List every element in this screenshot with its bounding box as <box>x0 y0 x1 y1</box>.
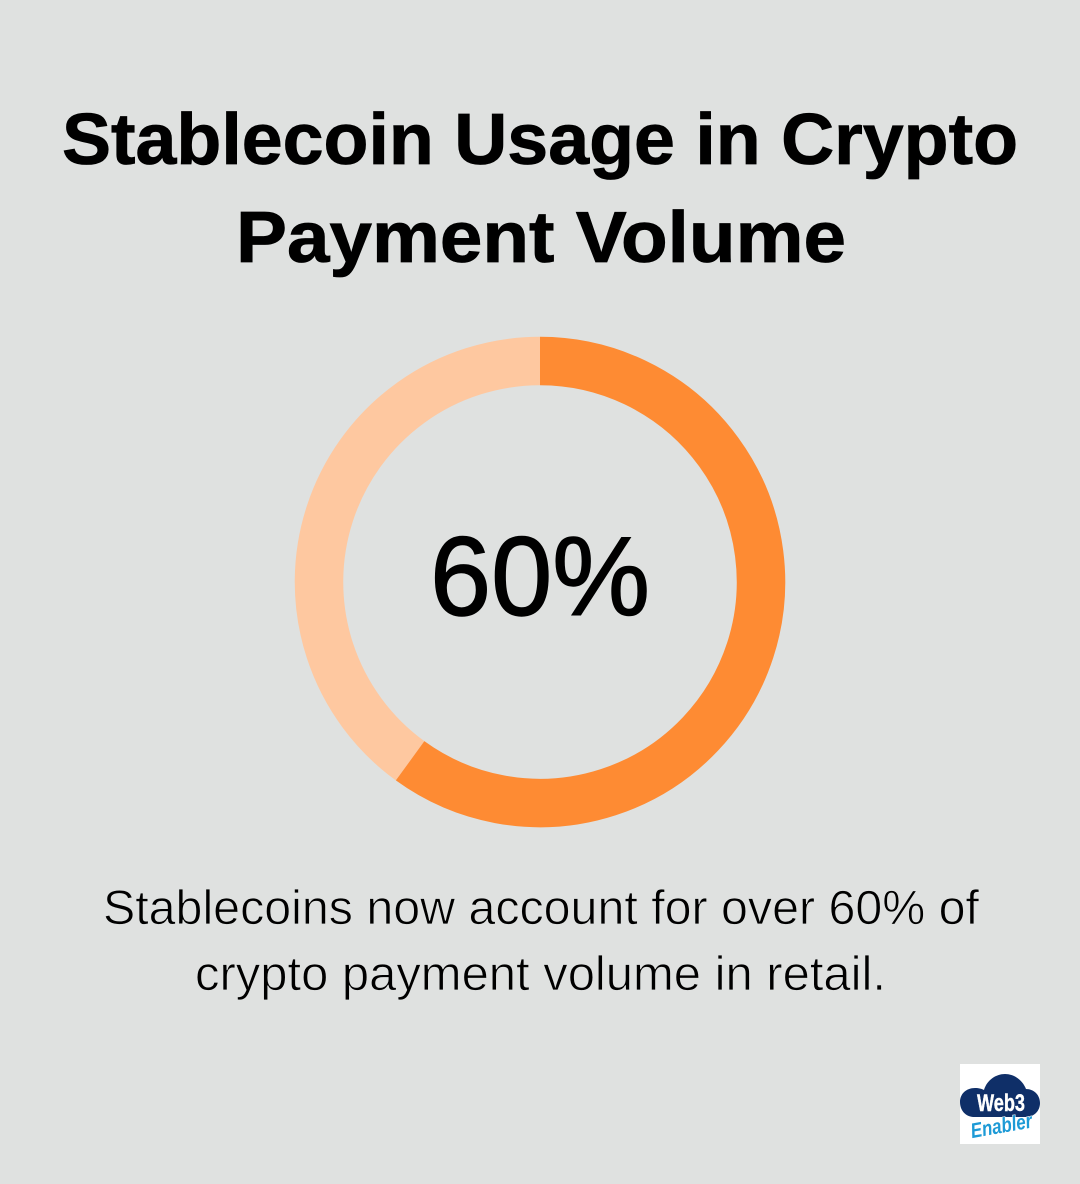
description text: crypto payment volume in retail. <box>195 948 886 1001</box>
donut remainder segment <box>319 361 540 761</box>
title <box>62 100 1018 278</box>
logo script: Enabler <box>969 1109 1035 1143</box>
logo: Web3 Enabler <box>960 1064 1040 1144</box>
description text: Stablecoins now account for over 60% of <box>103 882 980 935</box>
logo cloud <box>960 1074 1040 1117</box>
donut value segment <box>410 361 761 803</box>
description text <box>103 882 980 1001</box>
donut chart: 60% <box>319 361 761 803</box>
logo wordmark: Web3 <box>977 1090 1025 1117</box>
donut value label: 60% <box>430 514 650 639</box>
title: Payment Volume <box>236 198 846 278</box>
title: Stablecoin Usage in Crypto <box>62 100 1018 180</box>
